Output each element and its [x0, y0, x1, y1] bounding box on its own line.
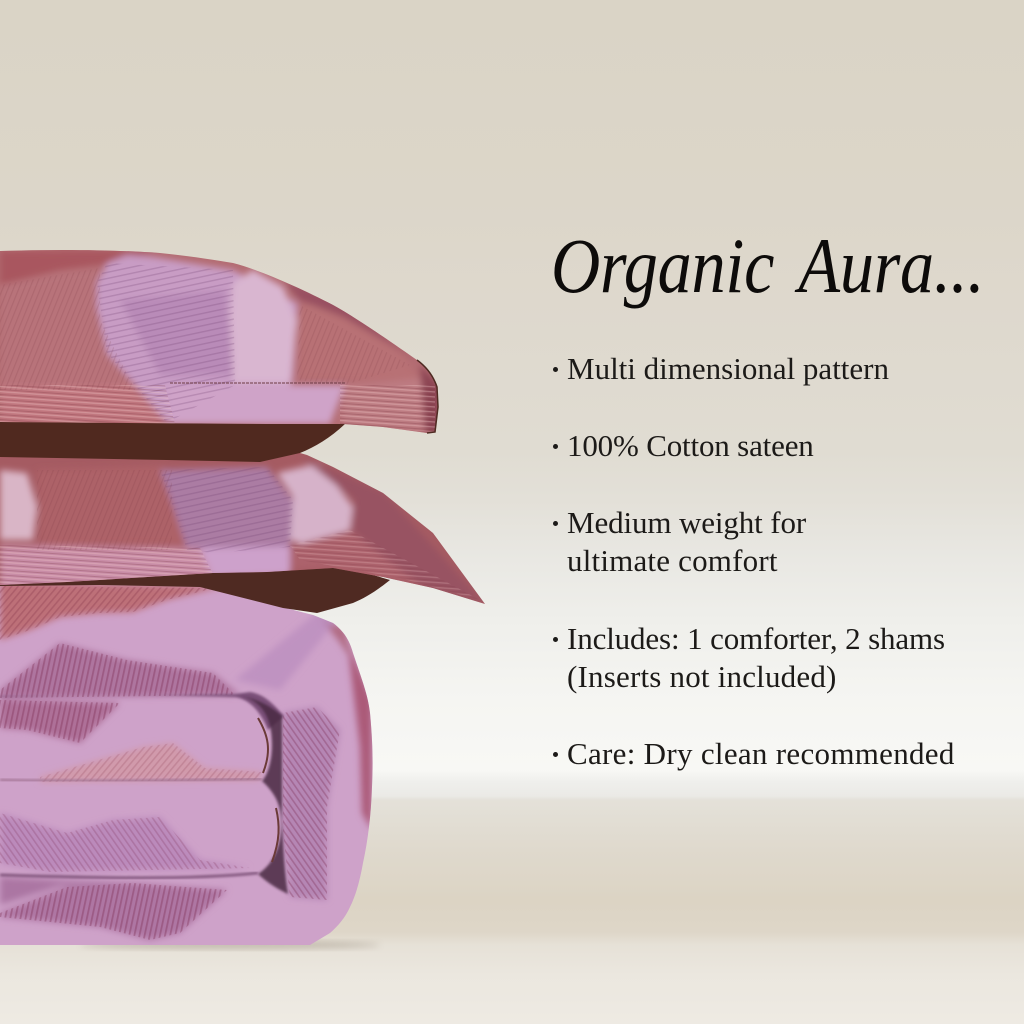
bullet: pattern: Multi dimensional pattern	[567, 350, 889, 386]
bullet: care: Care: Dry clean recommended	[567, 736, 955, 770]
fold shadows	[0, 692, 288, 894]
heading: Organic Aura...	[551, 222, 984, 309]
lower pillow sham	[0, 450, 490, 613]
bedding stack photo illustration	[0, 250, 485, 952]
upper pillow sham	[0, 245, 445, 462]
stitch line	[170, 382, 345, 384]
bullet: cotton: 100% Cotton sateen	[567, 428, 814, 462]
bullet: weight: Medium weight for	[567, 504, 806, 540]
bullet: weight: ultimate comfort	[567, 543, 778, 578]
bullet: includes	[553, 620, 945, 694]
upper sham underside	[0, 420, 345, 462]
lower sham front	[0, 450, 490, 610]
comforter rib texture	[0, 586, 340, 940]
upper sham piping	[417, 360, 438, 433]
bullet: includes: (Inserts not included)	[567, 659, 837, 694]
comforter	[0, 580, 380, 950]
upper sham front	[0, 245, 445, 435]
lower sham underside	[0, 563, 390, 613]
floor shadow	[80, 941, 380, 949]
feature list	[553, 350, 955, 770]
bullet: includes: Includes: 1 comforter, 2 shams	[567, 620, 945, 656]
bullet: weight	[553, 504, 806, 578]
